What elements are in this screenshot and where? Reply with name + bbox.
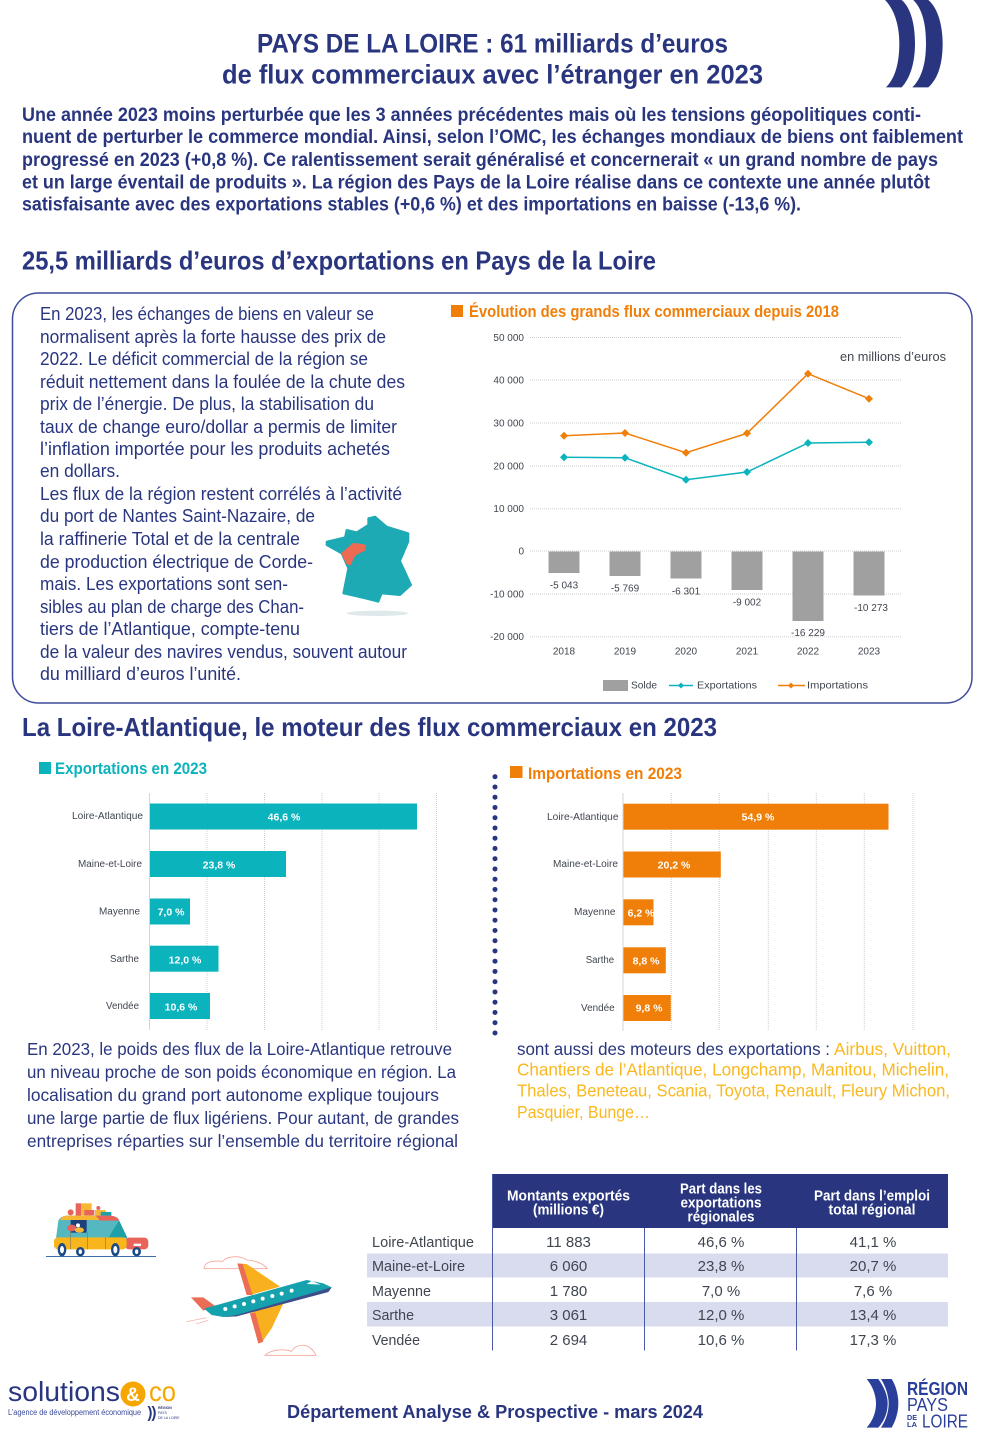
line and bar chart: flux commerciaux: 0: [518, 546, 524, 558]
table: exportations par département: 13,4 %: [850, 1307, 896, 1324]
logo: solutions&co: [8, 1376, 180, 1421]
logo: region chevrons top right: [885, 0, 943, 87]
chart legend: Solde: [631, 680, 657, 692]
line and bar chart: flux commerciaux: -10 000: [490, 590, 524, 600]
line and bar chart: flux commerciaux: 10 000: [493, 504, 524, 515]
panel text: Les flux de la région restent corrélés à l’activité: [40, 484, 402, 504]
table: exportations par département: Part dans l’emploi: [814, 1188, 930, 1204]
table: exportations par département: 1 780: [550, 1283, 587, 1300]
line and bar chart: flux commerciaux: -9 002: [733, 598, 762, 608]
line and bar chart: flux commerciaux: -20 000: [490, 632, 524, 643]
table: exportations par département: [367, 1174, 948, 1350]
bar chart: importations par département: 9,8 %: [636, 1002, 663, 1014]
table: exportations par département: 17,3 %: [850, 1332, 896, 1349]
logo: Région Pays de la Loire: LOIRE: [922, 1412, 968, 1432]
bar chart: importations par département: 20,2 %: [658, 860, 691, 872]
line and bar chart: flux commerciaux: 2020: [675, 646, 698, 658]
table: exportations par département: 2 694: [550, 1332, 587, 1349]
imports chart title: Importations en 2023: [528, 765, 682, 783]
text block left: [27, 1039, 459, 1151]
text block right: Pasquier, Bunge…: [517, 1102, 650, 1122]
panel: exportations: [12, 293, 972, 703]
title: PAYS DE LA LOIRE : 61 milliards d’euros: [257, 28, 728, 58]
line and bar chart: flux commerciaux: -10 273: [854, 603, 888, 614]
bar chart: exportations par département: Sarthe: [110, 954, 139, 965]
footer credit: Département Analyse & Prospective - mars 2024: [287, 1401, 704, 1422]
icon: map of France: [327, 517, 411, 616]
logo: solutions&co: &: [126, 1385, 140, 1406]
bar chart: exportations par département: Maine-et-Loire: [78, 859, 142, 870]
chart legend: [603, 680, 868, 692]
table: exportations par département: (millions €): [533, 1202, 604, 1218]
text block right: Chantiers de l’Atlantique, Longchamp, Manitou, Michelin,: [517, 1060, 949, 1080]
panel text: du milliard d’euros l’unité.: [40, 664, 241, 684]
table: exportations par département: 12,0 %: [698, 1307, 744, 1324]
logo: solutions&co: DE LA LOIRE: [158, 1416, 180, 1420]
logo: solutions&co: PAYS: [158, 1411, 167, 1415]
table: exportations par département: 20,7 %: [850, 1258, 896, 1275]
line and bar chart: flux commerciaux: 40 000: [493, 376, 524, 386]
text block right: Thales, Beneteau, Scania, Toyota, Renault, Fleury Michon,: [517, 1081, 950, 1101]
text block right: [517, 1039, 951, 1122]
table: exportations par département: 7,0 %: [702, 1283, 740, 1300]
bar chart: exportations par département: 12,0 %: [169, 954, 202, 966]
bar chart: exportations par département: Loire-Atlantique: [72, 811, 143, 822]
chart legend: Importations: [807, 680, 868, 692]
line and bar chart: flux commerciaux: 30 000: [493, 418, 524, 430]
line and bar chart: flux commerciaux: -6 301: [672, 586, 701, 598]
panel text: sibles au plan de charge des Chan-: [40, 597, 304, 617]
logo: Région Pays de la Loire: RÉGION: [907, 1378, 968, 1399]
table: exportations par département: exportations: [680, 1196, 762, 1212]
table: exportations par département: 11 883: [546, 1234, 591, 1251]
logo: Région Pays de la Loire: LA: [907, 1422, 917, 1429]
panel text: prix de l’énergie. De plus, la stabilisation du: [40, 394, 374, 414]
text block right: sont aussi des moteurs des exportations :: [517, 1039, 830, 1059]
logo: solutions&co: L’agence de développement économique: [8, 1408, 142, 1417]
table: exportations par département: 6 060: [550, 1258, 587, 1275]
bar chart: importations par département: Loire-Atlantique: [547, 812, 619, 823]
chart title: Évolution des grands flux commerciaux depuis 2018: [469, 302, 839, 321]
title: de flux commerciaux avec l’étranger en 2023: [222, 60, 763, 90]
panel text: du port de Nantes Saint-Nazaire, de: [40, 506, 315, 526]
line and bar chart: flux commerciaux: 50 000: [493, 333, 524, 344]
intro text block: et un large éventail de produits ». La région des Pays de la Loire réalise dans ce contexte une année plutôt: [22, 172, 931, 193]
text block left: En 2023, le poids des flux de la Loire-Atlantique retrouve: [27, 1039, 452, 1059]
icon: plane: [187, 1257, 332, 1355]
panel text: de la valeur des navires vendus, souvent autour: [40, 642, 407, 662]
bar chart: importations par département: [547, 793, 913, 1031]
panel text: l’inflation importée pour les produits achetés: [40, 439, 390, 459]
exports chart title: Exportations en 2023: [55, 760, 207, 778]
text block left: entreprises réparties sur l’ensemble du territoire régional: [27, 1131, 458, 1151]
table: exportations par département: 10,6 %: [698, 1332, 744, 1349]
panel text: de production électrique de Corde-: [40, 552, 313, 572]
chart legend: Exportations: [697, 680, 757, 692]
line and bar chart: flux commerciaux: 2022: [797, 646, 820, 658]
bar chart: exportations par département: 46,6 %: [268, 812, 301, 824]
bar chart: importations par département: Maine-et-Loire: [553, 859, 618, 870]
line and bar chart: flux commerciaux: en millions d’euros: [840, 350, 946, 364]
line and bar chart: flux commerciaux: 2018: [553, 646, 576, 658]
title: [222, 28, 763, 90]
bar chart: importations par département: 8,8 %: [633, 956, 660, 968]
logo: Région Pays de la Loire: [867, 1378, 968, 1432]
bar chart: exportations par département: Vendée: [106, 1001, 139, 1012]
table: exportations par département: total régional: [828, 1202, 916, 1218]
panel text: tiers de l’Atlantique, compte-tenu: [40, 619, 300, 639]
panel text: réduit nettement dans la foulée de la chute des: [40, 372, 405, 392]
bar chart: importations par département: Sarthe: [586, 955, 615, 966]
intro text block: [22, 105, 964, 216]
line and bar chart: flux commerciaux: 2019: [614, 646, 637, 658]
heading: exportations: 25,5 milliards d’euros d’exportations en Pays de la Loire: [22, 246, 656, 276]
logo: Région Pays de la Loire: PAYS: [907, 1395, 948, 1415]
logo: Région Pays de la Loire: DE: [907, 1415, 917, 1422]
bar chart: importations par département: Mayenne: [574, 907, 616, 918]
line and bar chart: flux commerciaux: -5 769: [611, 584, 640, 594]
bar chart: exportations par département: 23,8 %: [203, 860, 236, 872]
line and bar chart: flux commerciaux: -5 043: [550, 580, 579, 592]
logo: solutions&co: co: [149, 1376, 176, 1407]
bar chart: importations par département: 6,2 %: [628, 908, 655, 920]
panel text: taux de change euro/dollar a permis de limiter: [40, 417, 397, 437]
table: exportations par département: Mayenne: [372, 1283, 431, 1300]
icon: car: [46, 1203, 156, 1256]
bar chart: exportations par département: 10,6 %: [165, 1002, 198, 1014]
table: exportations par département: 41,1 %: [850, 1234, 896, 1251]
text block left: localisation du grand port autonome explique toujours: [27, 1085, 439, 1105]
intro text block: nuent de perturber le commerce mondial. Ainsi, selon l’OMC, les échanges mondiaux de biens ont faiblement: [22, 127, 964, 148]
intro text block: progressé en 2023 (+0,8 %). Ce ralentissement serait généralisé et concernerait « un grand nombre de pays: [22, 150, 938, 171]
table: exportations par département: Part dans les: [680, 1182, 762, 1198]
panel text: 2022. Le déficit commercial de la région se: [40, 349, 368, 369]
heading: Loire-Atlantique: La Loire-Atlantique, le moteur des flux commerciaux en 2023: [22, 712, 717, 742]
panel text: En 2023, les échanges de biens en valeur se: [40, 304, 374, 324]
bar chart: importations par département: Vendée: [581, 1003, 615, 1014]
bar chart: exportations par département: Mayenne: [99, 906, 140, 918]
panel text: mais. Les exportations sont sen-: [40, 574, 288, 594]
table: exportations par département: Vendée: [372, 1332, 420, 1349]
table: exportations par département: régionales: [688, 1210, 754, 1226]
panel text: la raffinerie Total et de la centrale: [40, 529, 300, 549]
table: exportations par département: 7,6 %: [854, 1283, 892, 1300]
line and bar chart: flux commerciaux: -16 229: [791, 628, 825, 639]
table: exportations par département: Montants exportés: [507, 1188, 630, 1204]
table: exportations par département: 46,6 %: [698, 1234, 744, 1251]
panel text: en dollars.: [40, 461, 120, 481]
line and bar chart: flux commerciaux: 20 000: [493, 462, 524, 472]
text block left: un niveau proche de son poids économique en région. La: [27, 1062, 456, 1082]
bar chart: exportations par département: [72, 793, 436, 1030]
bar chart: importations par département: 54,9 %: [742, 812, 775, 824]
panel text: [40, 304, 407, 684]
text block right: Airbus, Vuitton,: [834, 1039, 951, 1059]
bar chart: exportations par département: 7,0 %: [158, 906, 185, 918]
intro text block: satisfaisante avec des exportations stables (+0,6 %) et des importations en baisse (-13,6 %).: [22, 195, 801, 216]
table: exportations par département: 3 061: [550, 1307, 587, 1324]
logo: solutions&co: solutions: [8, 1376, 120, 1407]
table: exportations par département: Maine-et-Loire: [372, 1258, 465, 1275]
intro text block: Une année 2023 moins perturbée que les 3 années précédentes mais où les tensions géopolitiques conti-: [22, 105, 921, 126]
line and bar chart: flux commerciaux: 2021: [736, 646, 759, 658]
table: exportations par département: Loire-Atlantique: [372, 1234, 474, 1251]
line and bar chart: flux commerciaux: 2023: [858, 646, 881, 658]
line and bar chart: flux commerciaux: [490, 333, 946, 692]
table: exportations par département: 23,8 %: [698, 1258, 744, 1275]
panel text: normalisent après la forte hausse des prix de: [40, 327, 386, 347]
table: exportations par département: Sarthe: [372, 1307, 414, 1324]
text block left: une large partie de flux ligériens. Pour autant, de grandes: [27, 1108, 459, 1128]
logo: solutions&co: RÉGION: [158, 1405, 172, 1410]
